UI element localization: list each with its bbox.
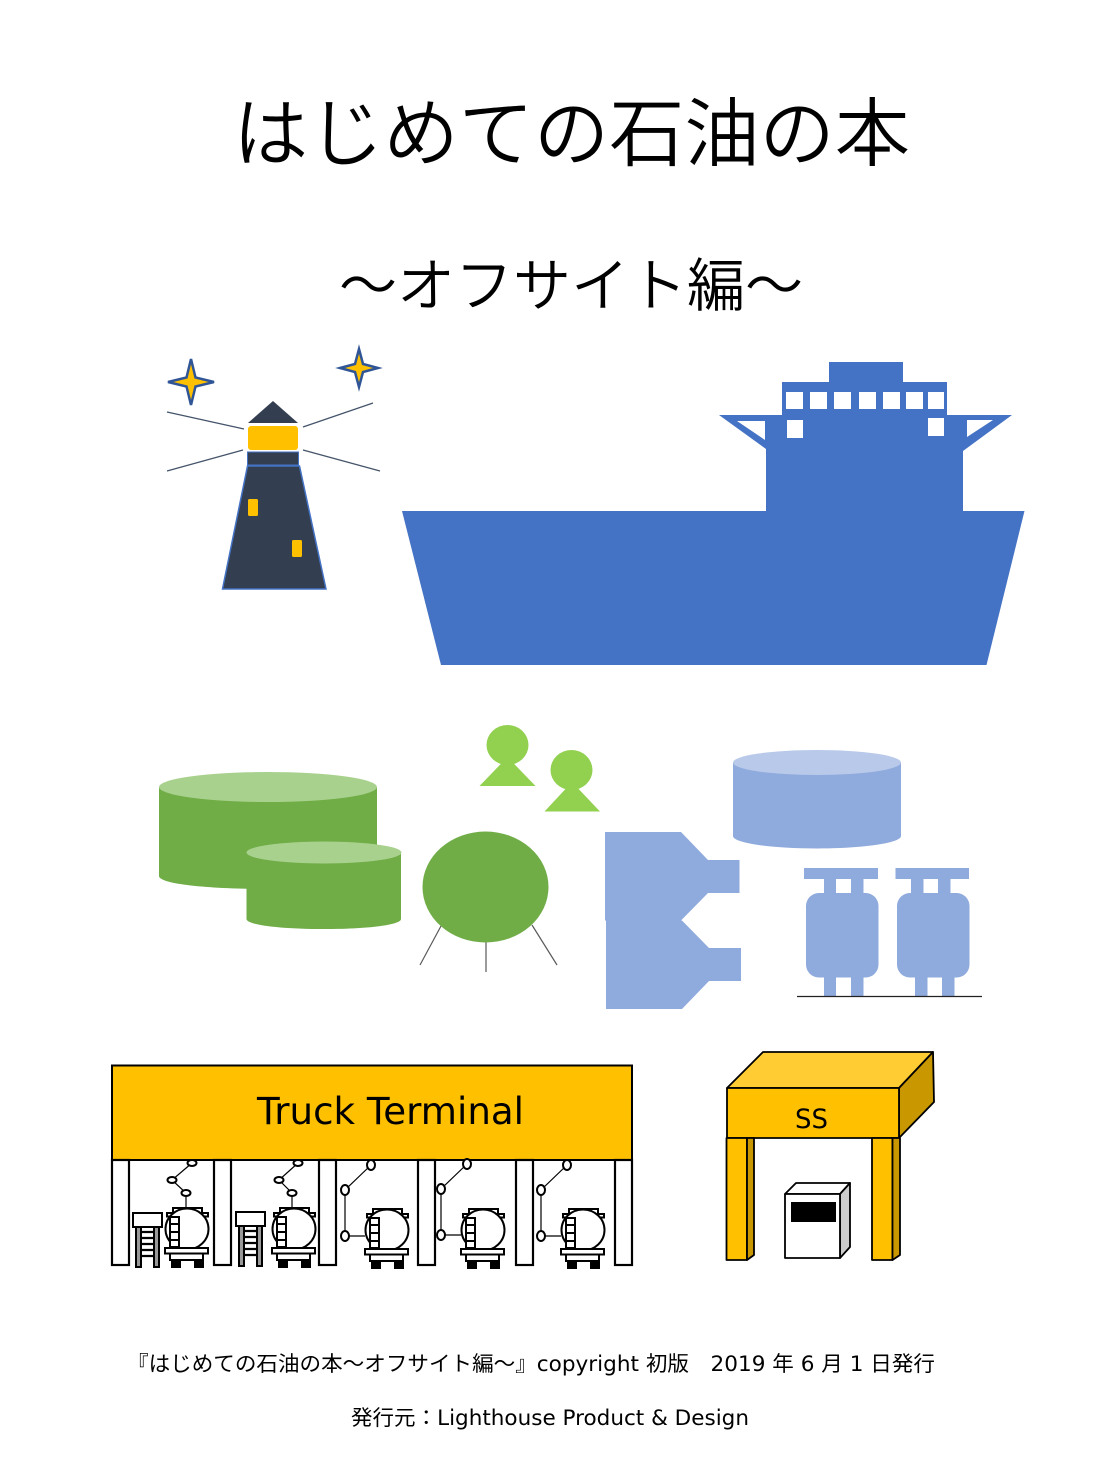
title: はじめての石油の本 [233,73,910,182]
truck terminal canopy [112,1066,632,1160]
subtitle: ～オフサイト編～ [339,239,803,323]
canopy top [727,1052,933,1088]
lighthouse band [248,452,298,465]
loading arms [168,1159,571,1241]
bridge windows [786,392,944,438]
canopy front [727,1088,899,1138]
right leg [872,1138,900,1260]
icon: spherical tank [420,832,557,972]
footer: publisher line: 発行元：Lighthouse Product & Design [351,1406,749,1430]
small green tank [246,842,402,929]
light rays [167,403,380,471]
tanker truck 1 [165,1208,208,1267]
icon: star left [168,359,214,405]
loading stairs 1 [133,1213,162,1267]
ship hull [402,511,1024,665]
loading stairs 2 [236,1212,265,1266]
terminal pillars [112,1160,632,1265]
icon: blue storage tank [733,750,901,848]
fuel pump [785,1183,850,1258]
icon: service station [726,1052,934,1260]
panel: truck terminal [112,1066,632,1268]
icon: lighthouse [167,349,380,589]
lighthouse lamp [248,426,298,450]
icon: left blue vessel [804,868,878,996]
ship bridge [719,362,1012,511]
lighthouse roof [248,401,298,423]
tanker truck 4 [461,1209,504,1268]
icon: tanker ship [402,362,1024,665]
lighthouse tower [222,466,326,589]
tanker truck 3 [365,1209,408,1268]
icon: star right [340,349,378,387]
lighthouse window upper [248,499,258,516]
tanker truck 5 [561,1209,604,1268]
footer: copyright line: 『はじめての石油の本～オフサイト編～』copyright 初版 2019 年 6 月 1 日発行 [127,1352,935,1376]
lighthouse window lower [292,540,302,557]
icon: person left [480,725,536,786]
icon: right blue vessel [896,868,970,996]
tanker truck 2 [272,1208,316,1267]
vessel ground line [797,996,982,998]
large green tank [159,772,377,889]
icon: green storage tanks [159,772,402,929]
truck terminal label: Truck Terminal [256,1090,524,1133]
bridge wing openings [737,420,993,440]
service station label: SS [795,1104,828,1135]
icon: person right [544,750,600,812]
icon: lower blue unit [606,920,741,1009]
icon: upper blue unit [605,832,740,920]
canopy side [899,1052,934,1138]
left leg [726,1138,754,1260]
